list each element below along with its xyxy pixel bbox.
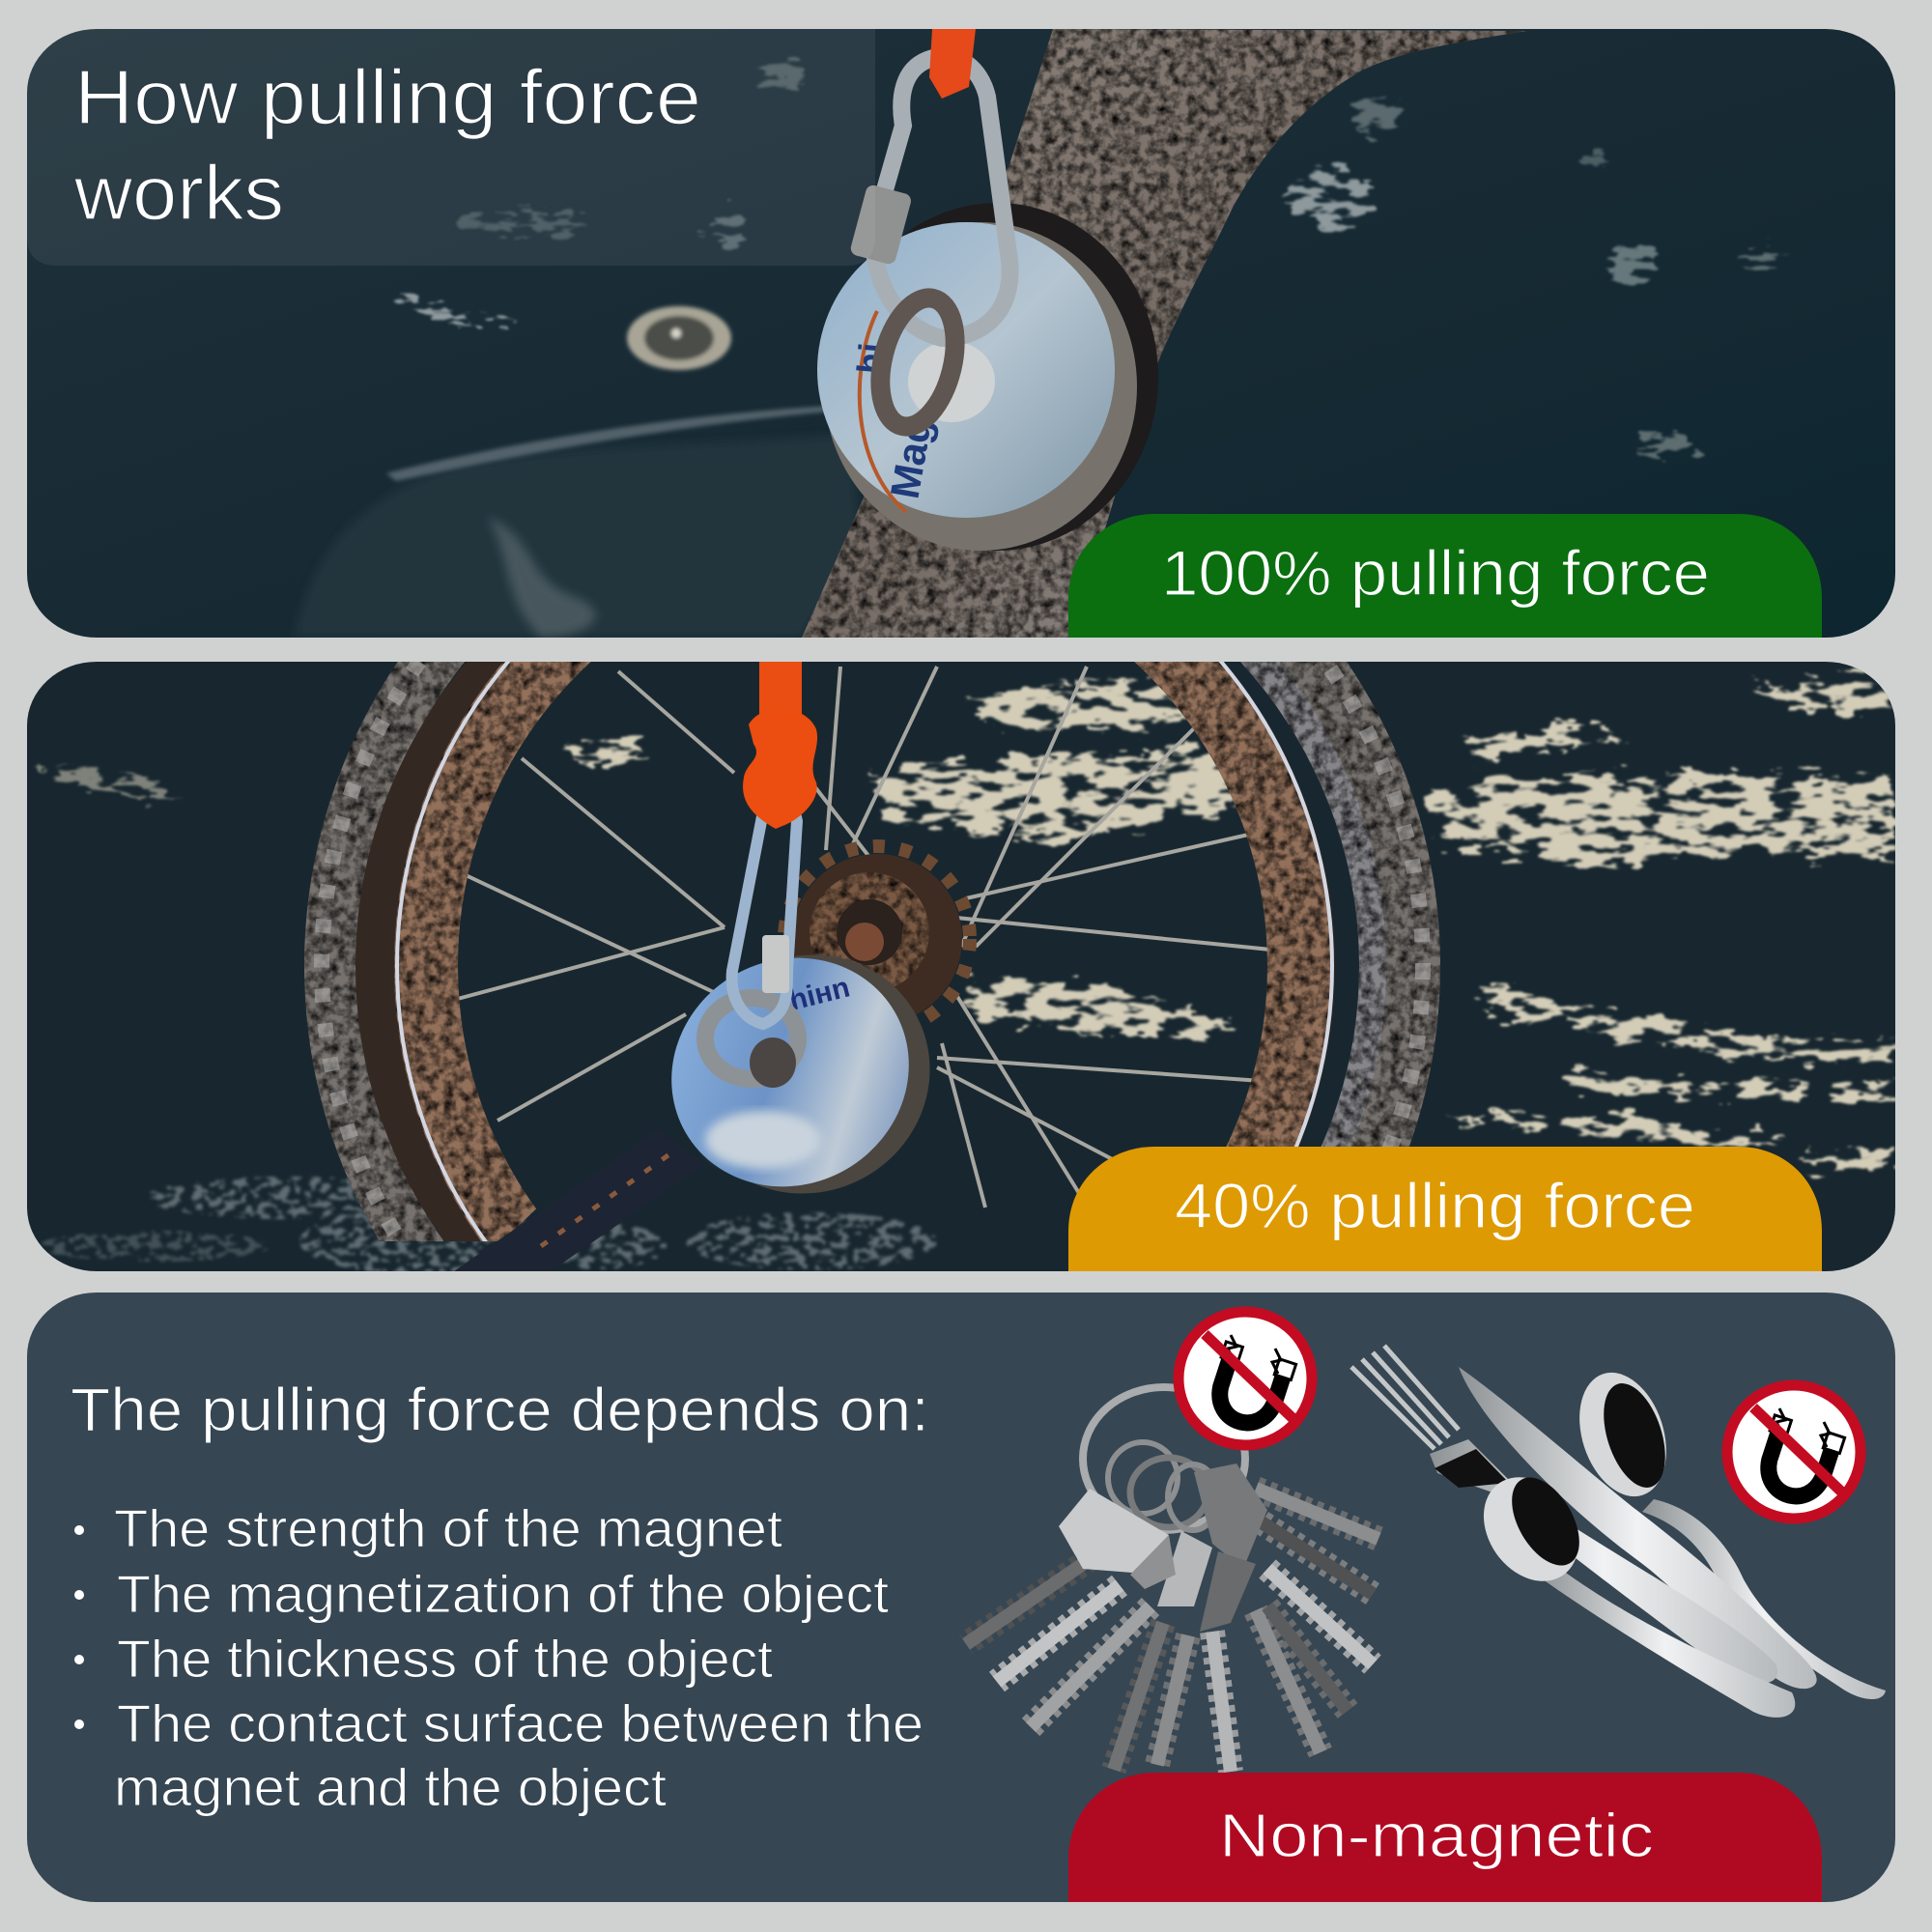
rope <box>929 29 976 99</box>
carabiner <box>873 56 1010 338</box>
wrench <box>802 29 1527 638</box>
carabiner sleeve <box>762 935 789 993</box>
tyre tread <box>322 431 1423 1501</box>
badge: non-magnetic <box>1068 1773 1822 1902</box>
frame bar <box>454 1130 705 1271</box>
tyre <box>331 440 1413 1492</box>
bullet list: The magnetization of the object <box>117 1564 889 1624</box>
eye bolt <box>705 998 798 1079</box>
panel: non-magnetic and dependencies <box>27 1293 1895 1902</box>
carabiner <box>732 803 797 1024</box>
knife <box>1459 1367 1817 1689</box>
spoon left <box>1464 1459 1795 1718</box>
low splash texture <box>39 1177 937 1275</box>
rope knot <box>743 709 817 829</box>
bicycle wheel <box>322 431 1423 1501</box>
key blades <box>966 1489 1378 1772</box>
badge: 40% pulling force: 40% pulling force <box>1175 1170 1695 1241</box>
magnet <box>817 29 1158 551</box>
oil slick on water <box>295 435 860 638</box>
ring <box>868 290 967 435</box>
water ripple streaks <box>386 406 831 481</box>
panel: 100% pulling force photo <box>27 29 1895 638</box>
spokes <box>454 667 1290 1208</box>
dark tyre wall <box>375 506 1316 1426</box>
magnet light reflections <box>705 1111 821 1169</box>
sprocket <box>784 846 970 1032</box>
rim <box>426 524 1299 1408</box>
title backdrop <box>27 29 875 266</box>
rim highlight <box>397 496 1332 1436</box>
heading: how pulling force works: works <box>73 150 284 236</box>
badge: 100% pulling force <box>1068 514 1822 638</box>
bubble on water <box>627 306 731 370</box>
keys photo <box>966 1387 1378 1772</box>
tyre right wall <box>401 483 1386 1449</box>
magnet body <box>902 203 1158 551</box>
magnet face <box>817 222 1115 518</box>
fork <box>1351 1346 1777 1684</box>
magnet logo text: hi <box>849 341 892 376</box>
key teeth <box>966 1489 1378 1772</box>
bullet list: The strength of the magnet <box>114 1498 782 1558</box>
magnet <box>630 662 974 1238</box>
magnet logo text: Mag <box>882 414 940 502</box>
badge: 100% pulling force: 100% pulling force <box>1161 537 1710 609</box>
spoon right <box>1565 1361 1886 1699</box>
icon: no magnet (keys) <box>1179 1312 1312 1445</box>
bullet list: The contact surface between the <box>117 1693 923 1753</box>
bullet list <box>74 1498 923 1817</box>
eye bolt <box>908 341 995 422</box>
magnet body <box>641 910 974 1238</box>
heading: the pulling force depends on: The pulling force depends on: <box>71 1377 929 1444</box>
water highlights <box>39 676 1893 1169</box>
cutlery photo <box>1351 1346 1886 1718</box>
key heads <box>1059 1463 1267 1632</box>
badge: non-magnetic: Non-magnetic <box>1219 1801 1654 1870</box>
icon: no magnet (cutlery) <box>1727 1385 1861 1519</box>
key ring <box>1083 1387 1245 1530</box>
small rings <box>1108 1442 1178 1514</box>
badge: 40% pulling force <box>1068 1147 1822 1271</box>
panel: 40% pulling force photo <box>27 431 1895 1501</box>
carabiner sleeve <box>849 184 913 266</box>
magnet logo text: hiнn <box>786 972 853 1017</box>
magnet face <box>630 915 951 1230</box>
orange rope <box>759 662 802 720</box>
heading: how pulling force works: How pulling force <box>74 54 701 140</box>
orange logo arc <box>860 311 906 512</box>
floating debris <box>396 64 1788 452</box>
bullet list: magnet and the object <box>114 1757 667 1817</box>
pale reflection <box>488 517 596 638</box>
heading: how pulling force works <box>73 54 701 236</box>
bullet list: The thickness of the object <box>117 1629 773 1689</box>
